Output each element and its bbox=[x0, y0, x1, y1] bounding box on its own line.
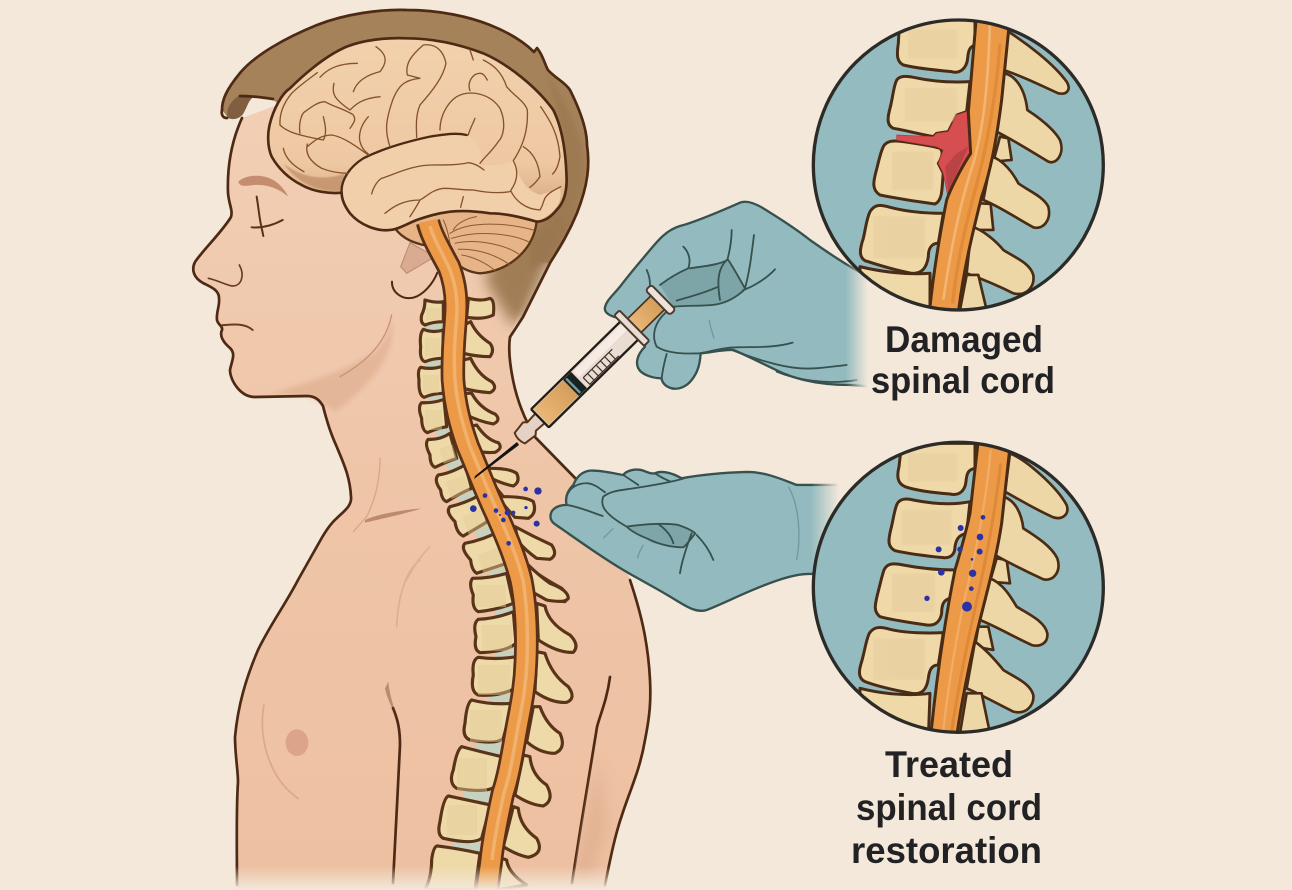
label line 1: Damaged bbox=[885, 319, 1043, 360]
jaw shadow bbox=[270, 318, 393, 412]
spinal cord in treated inset bbox=[931, 440, 1010, 737]
label: treated spinal cord restoration bbox=[851, 744, 1042, 871]
plunger seal bbox=[563, 372, 587, 396]
neck shading from hair bbox=[478, 254, 548, 330]
inset: damaged spinal cord bbox=[813, 13, 1103, 313]
neck tendon bbox=[353, 458, 380, 532]
faint wrist crease bbox=[788, 487, 799, 560]
cord orange bbox=[428, 221, 526, 890]
hemorrhage bbox=[897, 112, 971, 194]
plunger rod bbox=[627, 295, 665, 333]
collar and neck creases bbox=[353, 458, 430, 580]
temporal lobe top edge bbox=[342, 134, 467, 193]
finger flange bbox=[614, 310, 649, 346]
pectoral crease bbox=[262, 705, 298, 799]
scale marks bbox=[583, 349, 619, 384]
inset anatomy bbox=[859, 440, 1067, 740]
brain folds bbox=[280, 45, 561, 217]
shoulder crease bbox=[397, 560, 420, 627]
cervical vertebrae bbox=[418, 298, 567, 602]
spine column bbox=[418, 298, 576, 890]
chest details bbox=[262, 560, 420, 799]
palm shadow bbox=[627, 524, 695, 547]
label line 2: spinal cord bbox=[856, 787, 1042, 828]
upper hand cover bbox=[868, 250, 888, 398]
nose bbox=[208, 265, 242, 286]
syringe bbox=[504, 282, 678, 455]
lower hand cover bbox=[839, 476, 859, 576]
cord shading bbox=[943, 450, 991, 730]
liquid bbox=[533, 380, 579, 425]
lower hand fade bbox=[811, 476, 839, 576]
inset background bbox=[813, 20, 1103, 310]
facets and processes bbox=[960, 453, 1067, 733]
cerebrum outline bbox=[268, 38, 567, 230]
closed eye bbox=[252, 197, 283, 236]
barrel bbox=[531, 321, 639, 427]
vertebral bodies bbox=[859, 443, 975, 740]
frontal lobe shadow bbox=[283, 163, 345, 191]
cord shadow bbox=[952, 463, 1001, 732]
trapezius crease bbox=[407, 547, 430, 580]
injected stem cells in the neck bbox=[470, 487, 542, 546]
cerebellum folds bbox=[438, 217, 533, 271]
ear inner bbox=[401, 243, 435, 273]
cord highlight bbox=[430, 226, 527, 860]
temporal lobe fill bbox=[342, 134, 561, 230]
inset ring bbox=[813, 20, 1103, 310]
needle bbox=[474, 442, 519, 479]
thoracic vertebrae bbox=[425, 565, 576, 890]
cerebrum fill bbox=[268, 38, 567, 230]
arm shadow bbox=[573, 770, 606, 880]
faint finger shading bbox=[603, 528, 643, 558]
mouth bbox=[222, 324, 253, 330]
jaw line bbox=[340, 315, 392, 377]
cord shadow bbox=[953, 43, 1000, 303]
barrel shine bbox=[573, 324, 628, 377]
figure: boy in profile bbox=[193, 10, 650, 890]
bone texture bbox=[873, 453, 957, 680]
vertebra texture bbox=[423, 308, 512, 835]
hair back shading bbox=[530, 70, 585, 270]
brain bbox=[268, 38, 567, 273]
inset background bbox=[813, 442, 1103, 732]
bottom fade of the figure bbox=[225, 866, 625, 890]
upper hand fade bbox=[846, 250, 868, 398]
seal highlight bbox=[565, 378, 581, 394]
outlines of the head, back and chest bbox=[193, 10, 650, 885]
inset ring bbox=[813, 442, 1103, 732]
inset anatomy bbox=[860, 13, 1069, 313]
label: damaged spinal cord bbox=[871, 319, 1055, 401]
hair front shadow bbox=[227, 95, 255, 119]
spinal cord bbox=[428, 221, 527, 890]
glove creases bbox=[647, 230, 857, 382]
hair bbox=[222, 10, 588, 263]
spinal cord in damaged inset bbox=[929, 13, 1010, 313]
glove silhouette bbox=[551, 470, 847, 611]
body skin bbox=[193, 60, 650, 890]
cerebellum and brainstem bbox=[395, 210, 537, 273]
upper gloved hand holding the syringe bbox=[605, 202, 873, 389]
illustration: spinal cord treatment bbox=[192, 8, 1105, 889]
eyebrow bbox=[238, 176, 288, 197]
glove silhouette bbox=[605, 202, 873, 389]
nipple bbox=[286, 729, 308, 756]
cord outline bbox=[428, 222, 526, 890]
inset: treated spinal cord bbox=[813, 440, 1103, 740]
lower gloved hand bbox=[551, 470, 847, 611]
hemorrhage shadow bbox=[945, 147, 968, 192]
bone texture bbox=[952, 114, 958, 122]
ear bbox=[392, 273, 437, 298]
faint thumb crease bbox=[709, 320, 714, 338]
vertebral bodies bbox=[860, 13, 975, 313]
shadow between fingers bbox=[660, 260, 747, 307]
back arm shading bbox=[573, 770, 606, 880]
label line 2: spinal cord bbox=[871, 360, 1055, 401]
cord highlights bbox=[943, 23, 990, 300]
stem cells bbox=[924, 515, 985, 612]
collarbone bbox=[365, 508, 422, 523]
intervertebral discs bbox=[436, 300, 509, 870]
face features bbox=[208, 176, 437, 377]
blurred hair fade bbox=[478, 254, 548, 330]
label line 3: restoration bbox=[851, 830, 1042, 871]
glove creases bbox=[567, 473, 713, 573]
plunger head bbox=[646, 285, 676, 315]
facets and processes bbox=[960, 32, 1069, 310]
syringe hub bbox=[512, 412, 546, 446]
arm shading bbox=[385, 682, 398, 720]
label line 1: Treated bbox=[885, 744, 1013, 785]
